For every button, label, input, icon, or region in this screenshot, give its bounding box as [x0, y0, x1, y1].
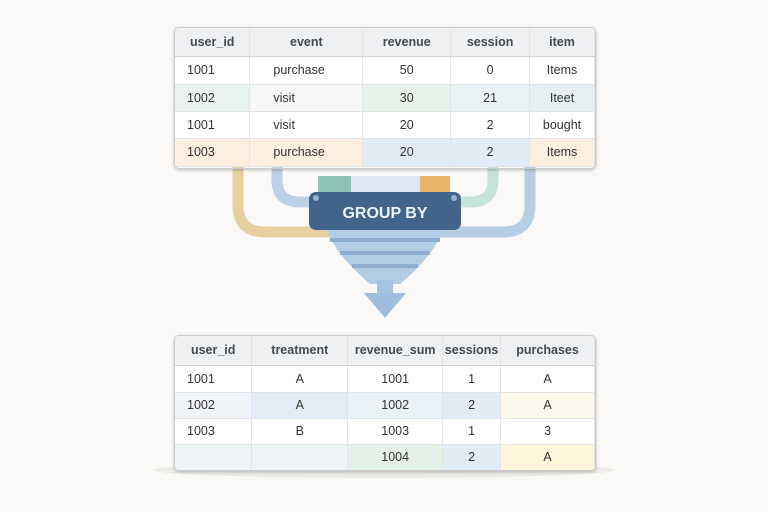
table: grouped output: 1003 — [381, 424, 409, 438]
table: grouped output — [174, 335, 596, 471]
table: input events — [174, 27, 596, 169]
table: input events: 30 — [400, 90, 414, 104]
table: grouped output: purchases — [516, 343, 579, 357]
table: input events: 50 — [400, 63, 414, 77]
table: grouped output: user_id — [191, 343, 235, 357]
table: input events: item — [549, 35, 575, 49]
table: input events: Iteet — [550, 90, 574, 104]
table: input events: purchase — [273, 145, 325, 159]
table: grouped output: A — [543, 372, 552, 386]
table: input events: revenue — [383, 35, 431, 49]
table: input events: 1003 — [187, 145, 215, 159]
table: input events: session — [467, 35, 513, 49]
table: input events: visit — [273, 90, 295, 104]
table: input events: bought — [543, 118, 581, 132]
table: grouped output: 1 — [468, 424, 475, 438]
table: grouped output: A — [296, 398, 304, 412]
table: input events: purchase — [273, 63, 325, 77]
table: input events: 2 — [487, 145, 494, 159]
table: grouped output: A — [543, 450, 552, 464]
pipe: green inner right — [440, 160, 493, 202]
banner: GROUP BY: GROUP BY — [342, 205, 428, 222]
table: grouped output: A — [296, 372, 304, 386]
table: grouped output: 2 — [468, 450, 475, 464]
table: input events: 2 — [487, 118, 494, 132]
table: grouped output: 1001 — [381, 372, 409, 386]
table: grouped output: 1 — [468, 372, 475, 386]
table: input events: event — [290, 35, 323, 49]
table: grouped output: B — [296, 424, 304, 438]
table: input events: 1001 — [187, 63, 215, 77]
table: grouped output: treatment — [271, 343, 328, 357]
table: input events: 21 — [483, 90, 497, 104]
funnel cone — [318, 176, 450, 318]
table: grouped output: 2 — [468, 398, 475, 412]
table: input events: Items — [547, 145, 577, 159]
table: grouped output: 3 — [544, 424, 551, 438]
table: input events: 0 — [487, 63, 494, 77]
table: input events: visit — [273, 118, 295, 132]
pipe: blue right — [440, 160, 530, 232]
banner: GROUP BY — [309, 192, 461, 230]
table: grouped output: 1001 — [187, 372, 215, 386]
table: grouped output: 1003 — [187, 424, 215, 438]
table: grouped output: 1002 — [187, 398, 215, 412]
table: input events: 1001 — [187, 118, 215, 132]
table: grouped output: 1002 — [381, 398, 409, 412]
table: grouped output: A — [543, 398, 552, 412]
table: grouped output: 1004 — [381, 450, 409, 464]
pipe: blue inner left — [277, 160, 330, 202]
table: input events: 1002 — [187, 90, 215, 104]
table: input events: 20 — [400, 118, 414, 132]
table: grouped output: sessions — [445, 343, 498, 357]
table: input events: Items — [547, 63, 577, 77]
table: grouped output: revenue_sum — [355, 343, 435, 357]
pipe: orange left — [238, 160, 330, 232]
table: input events: user_id — [190, 35, 234, 49]
table: input events: 20 — [400, 145, 414, 159]
